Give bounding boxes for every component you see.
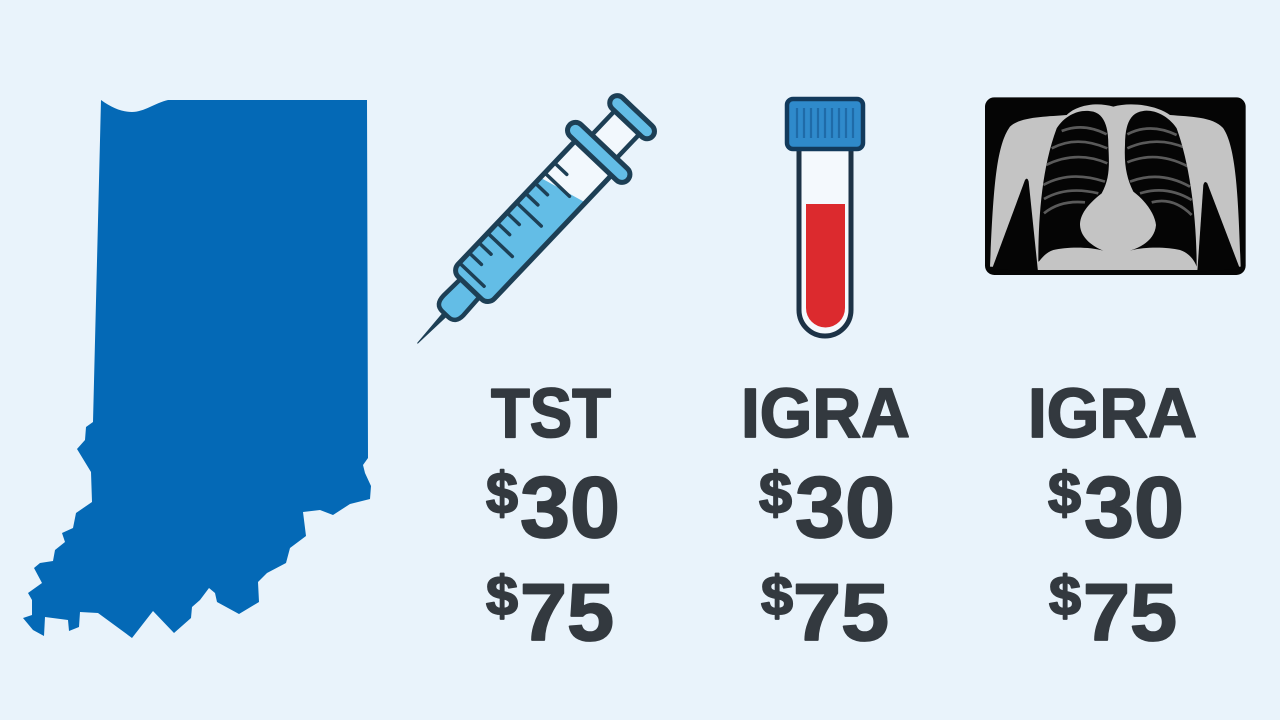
film background [985, 97, 1246, 275]
column: TST labels [486, 374, 620, 658]
price: $75: 75 [793, 568, 889, 658]
barrel [452, 137, 615, 305]
left lung [1038, 111, 1109, 262]
price: $30: $ [1048, 461, 1081, 526]
needle [416, 311, 448, 345]
column: second IGRA labels [1028, 374, 1197, 658]
ribs [1043, 127, 1192, 215]
price: $30: 30 [520, 460, 620, 556]
fluid [458, 178, 584, 299]
price: $75: $ [1049, 564, 1081, 627]
price: $30: 30 [1084, 460, 1184, 556]
heading: IGRA: IGRA [1028, 374, 1197, 452]
price: $75: $ [486, 564, 518, 627]
price: $75: 75 [520, 568, 614, 658]
tube body [799, 148, 851, 336]
price: $30: $ [486, 461, 518, 526]
needle hub [435, 277, 482, 324]
price: $30: $ [759, 461, 792, 526]
heading: TST: TST [491, 374, 611, 452]
barrel outline [452, 137, 615, 305]
cap ridges [797, 108, 853, 138]
column: first IGRA labels [741, 374, 910, 658]
price: $75: $ [761, 564, 793, 627]
plunger stem [584, 108, 642, 166]
icon: test tube [787, 99, 863, 336]
heading: IGRA: IGRA [741, 374, 910, 452]
price: $75: 75 [1083, 568, 1177, 658]
icon: chest x-ray [985, 97, 1246, 275]
icon: syringe [417, 93, 657, 344]
blood [806, 204, 845, 328]
price: $75 [1049, 564, 1177, 658]
left side shadow [992, 179, 1038, 272]
blue cap [787, 99, 863, 149]
price: $75 [486, 564, 614, 658]
map: Indiana state silhouette [23, 100, 371, 638]
flange [564, 119, 633, 186]
price: $30: 30 [795, 460, 895, 556]
plunger head [607, 92, 658, 142]
tick marks [459, 163, 579, 286]
right side shadow [1197, 182, 1240, 272]
torso [990, 104, 1241, 270]
right lung [1125, 111, 1197, 267]
price: $75 [761, 564, 889, 658]
